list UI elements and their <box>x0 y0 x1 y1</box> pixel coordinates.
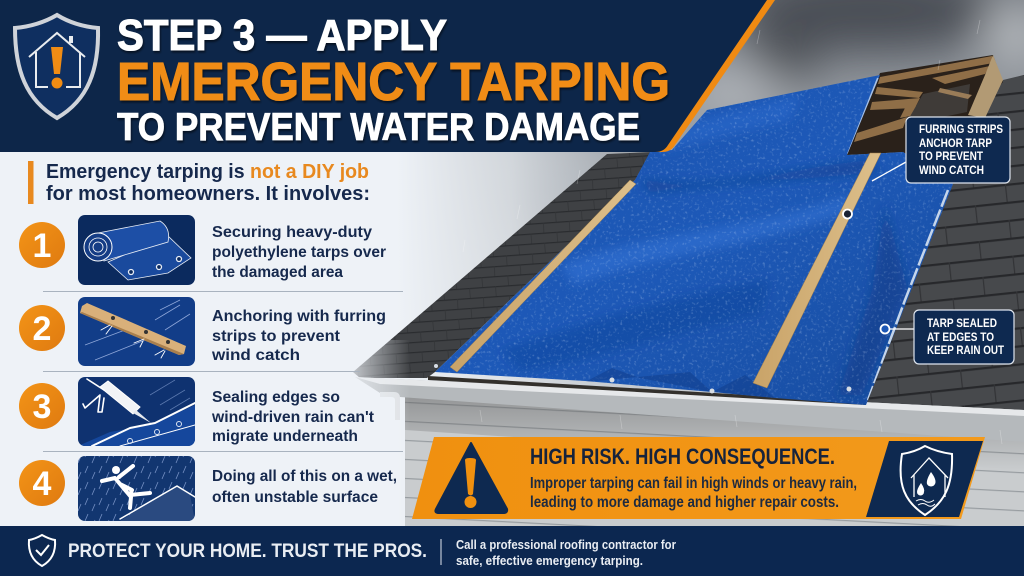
gutter and fascia <box>355 376 1024 442</box>
number badge 2 <box>19 305 65 351</box>
icon: caulk gun sealing tarp edge <box>78 377 195 446</box>
icon: shield with house alert <box>15 15 98 118</box>
title: EMERGENCY TARPING <box>117 52 670 112</box>
intro text block: for most homeowners. It involves: <box>46 183 370 205</box>
step 3 text: wind-driven rain can't <box>211 409 374 426</box>
icon: footer shield check <box>29 535 55 566</box>
house wall siding <box>405 395 1024 528</box>
step 3 text <box>211 389 374 445</box>
light left panel background <box>0 150 640 528</box>
callout: tarp sealed <box>880 310 1014 364</box>
rain streaks <box>463 20 1002 444</box>
step 4 <box>19 456 397 521</box>
exposed roof decking <box>847 55 1003 184</box>
right furring strip <box>753 153 881 388</box>
number badge 3: 3 <box>33 388 51 426</box>
warning banner <box>412 437 985 519</box>
fade over lower-left roof <box>345 340 410 430</box>
step 1 text <box>212 224 386 281</box>
title <box>117 11 670 149</box>
step 4 text: Doing all of this on a wet, <box>212 468 397 485</box>
number badge 3 <box>19 383 65 429</box>
step 3 text: migrate underneath <box>212 428 358 445</box>
step 3 <box>19 377 374 446</box>
icon: warning triangle <box>435 443 507 513</box>
callout: furring strips: TO PREVENT <box>919 151 983 163</box>
step 1 text: the damaged area <box>212 264 343 281</box>
title: TO PREVENT WATER DAMAGE <box>117 106 640 149</box>
step 2 text: strips to prevent <box>212 328 340 345</box>
step 2 <box>19 297 386 366</box>
footer call to action: Call a professional roofing contractor for <box>456 537 676 552</box>
warning text <box>530 444 857 511</box>
footer call to action: safe, effective emergency tarping. <box>456 553 643 568</box>
icon: person slipping on roof <box>78 456 195 521</box>
warning text: leading to more damage and higher repair costs. <box>530 494 839 511</box>
right shingles <box>860 75 1024 410</box>
callout: tarp sealed: TARP SEALED <box>927 318 997 330</box>
callout: furring strips: ANCHOR TARP <box>919 138 992 150</box>
left shingles <box>353 152 652 378</box>
step 1 text: polyethylene tarps over <box>212 244 386 261</box>
step 4 text: often unstable surface <box>212 489 378 506</box>
icon: furring strip on tarp <box>78 297 195 366</box>
intro text block <box>28 161 370 205</box>
step 2 text <box>211 308 386 364</box>
roof photo with blue tarp <box>345 20 1024 528</box>
step 4 text <box>212 468 397 506</box>
number badge 2: 2 <box>33 310 51 348</box>
step 1 text: Securing heavy-duty <box>212 224 372 241</box>
footer slogan: PROTECT YOUR HOME. TRUST THE PROS. <box>68 541 427 562</box>
number badge 4 <box>19 460 65 506</box>
warning text: Improper tarping can fail in high winds or heavy rain, <box>530 475 857 492</box>
step 2 text: wind catch <box>211 347 300 364</box>
callout: furring strips <box>843 117 1010 218</box>
callout: tarp sealed: KEEP RAIN OUT <box>927 345 1004 357</box>
footer call to action <box>456 537 676 568</box>
footer bar <box>0 526 1024 576</box>
step 2 text: Anchoring with furring <box>212 308 386 325</box>
step 1 <box>19 215 386 285</box>
number badge 4: 4 <box>33 465 52 503</box>
title: STEP 3 — APPLY <box>117 11 447 60</box>
callout: furring strips: FURRING STRIPS <box>919 124 1003 136</box>
warning text: HIGH RISK. HIGH CONSEQUENCE. <box>530 444 835 469</box>
number badge 1 <box>19 222 65 268</box>
callout: furring strips: WIND CATCH <box>919 165 984 177</box>
intro text block: Emergency tarping is not a DIY job <box>46 161 369 183</box>
left furring strip <box>450 180 636 372</box>
blue tarp <box>430 70 960 410</box>
callout: tarp sealed: AT EDGES TO <box>927 332 994 344</box>
number badge 1: 1 <box>33 227 51 265</box>
icon: shield with house and water drops <box>866 441 983 517</box>
header banner <box>0 0 775 152</box>
icon: rolled tarp <box>78 215 195 285</box>
step 3 text: Sealing edges so <box>212 389 340 406</box>
